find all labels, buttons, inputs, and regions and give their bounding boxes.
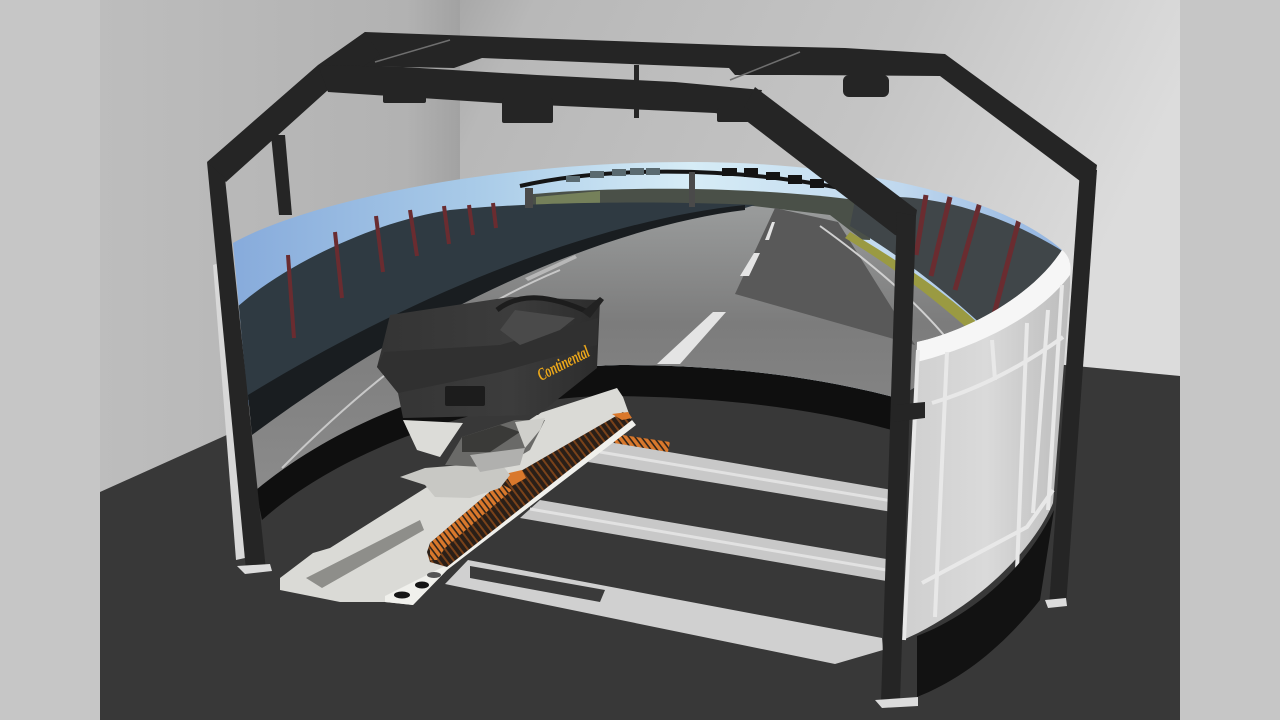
distant landscape — [530, 189, 870, 240]
car cabin body — [377, 297, 604, 418]
left room wall — [100, 0, 460, 492]
back room wall — [460, 0, 1180, 376]
camera unit 4 — [843, 75, 889, 97]
Continental logo: Continental — [534, 341, 593, 385]
left white shell strip — [213, 262, 245, 560]
shell lower black skirt — [917, 510, 1054, 697]
camera unit 3 — [717, 108, 749, 122]
left road white line — [282, 270, 560, 468]
black truss frame — [207, 32, 1097, 702]
centre hanging pin — [634, 65, 639, 118]
white outer shell of screen — [903, 250, 1071, 640]
left slope beam — [207, 32, 380, 182]
rear top beam — [318, 32, 1097, 186]
orange cable chain — [427, 412, 632, 567]
left barrier — [248, 205, 745, 435]
shell vertical ribs — [904, 285, 1062, 640]
black screen skirt — [256, 365, 897, 520]
leg base plates — [237, 564, 1067, 708]
left fence — [236, 203, 755, 400]
right road white line — [820, 226, 948, 340]
front rail 3 — [445, 560, 883, 664]
rear rail 1 — [588, 442, 892, 512]
camera unit 1 — [383, 90, 426, 103]
frame cross brace highlights — [375, 40, 800, 80]
left fence posts — [288, 203, 496, 338]
green infield — [536, 191, 600, 204]
front top beam — [318, 65, 762, 120]
screen bracket — [893, 402, 925, 422]
left front leg — [207, 162, 266, 570]
rear rail 2 — [520, 500, 892, 582]
shell rib lower — [922, 490, 1053, 583]
rear right leg — [1049, 170, 1097, 606]
right fence — [850, 197, 1064, 328]
floor — [100, 330, 1180, 720]
right fence posts — [916, 195, 1020, 322]
right front slope beam — [740, 87, 917, 240]
grass verge — [845, 232, 976, 326]
right side margin — [1180, 0, 1280, 720]
bridge over track — [520, 168, 840, 208]
small orange cable chain — [614, 434, 670, 452]
camera unit 2 — [502, 98, 553, 123]
right front leg — [881, 212, 916, 702]
left side margin — [0, 0, 100, 720]
road surface — [250, 205, 1000, 500]
road centre dashes — [657, 222, 775, 364]
shell top rim — [917, 250, 1071, 362]
projection screen scene — [225, 155, 1070, 500]
sky — [225, 155, 1070, 405]
shell rib upper — [932, 337, 1063, 403]
white sled base — [280, 388, 636, 605]
rear left post — [271, 135, 292, 215]
darker road patch — [735, 208, 915, 345]
hexapod motion platform — [400, 418, 545, 498]
